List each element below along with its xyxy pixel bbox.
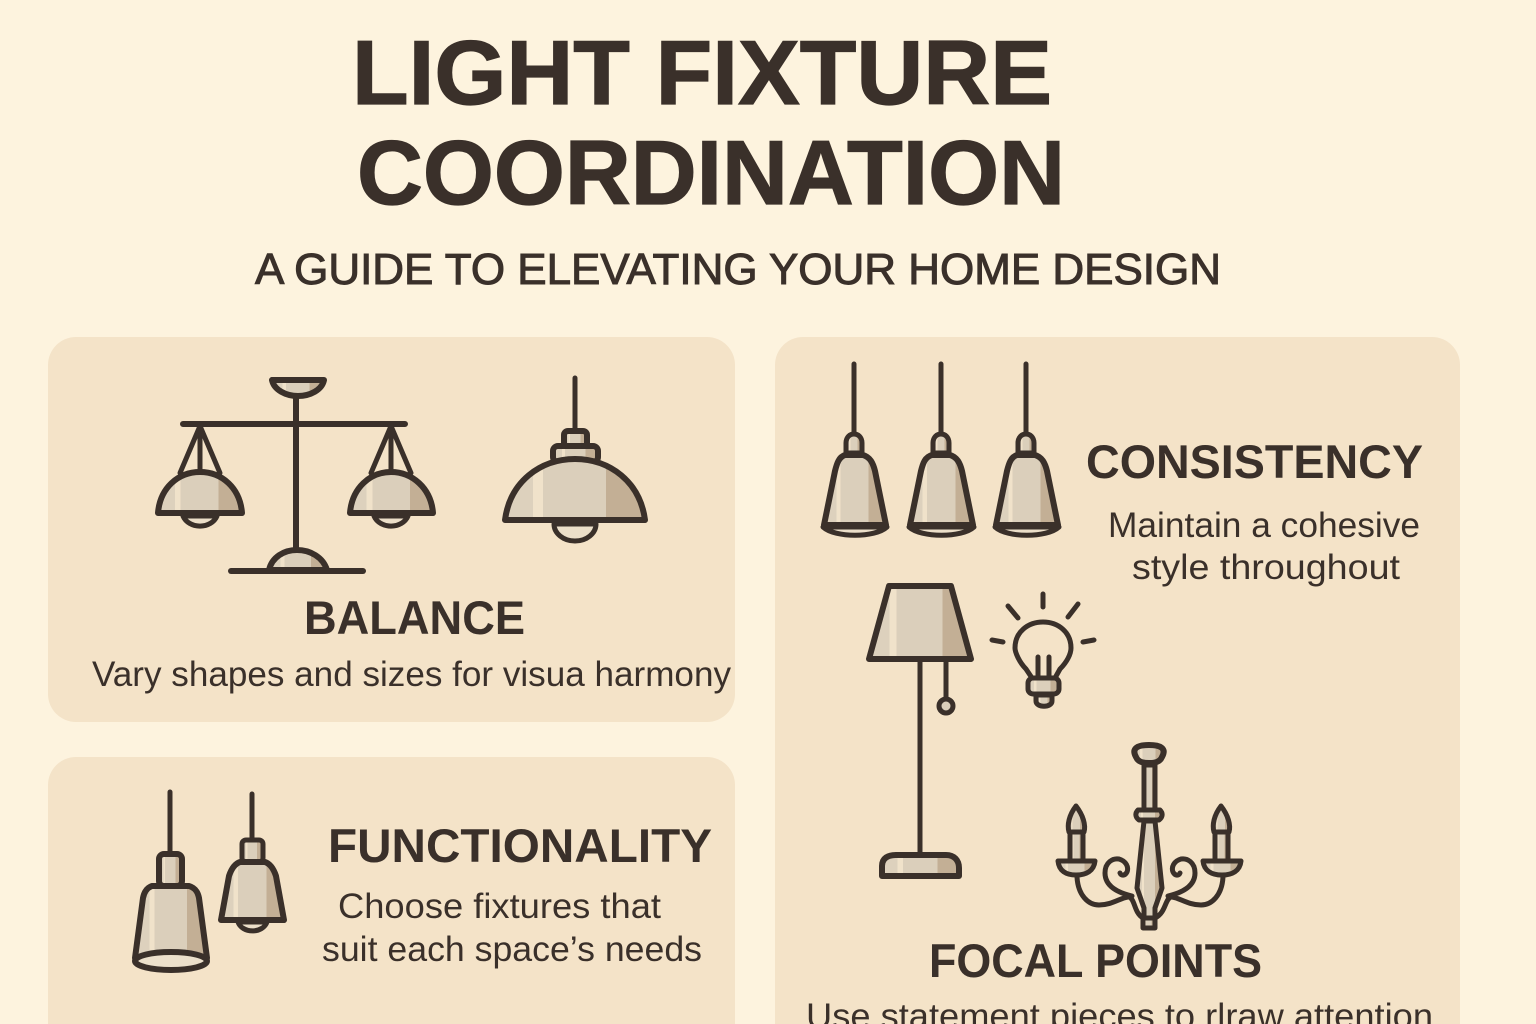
title: LIGHT FIXTURE <box>352 23 1052 124</box>
text: functionality description <box>322 887 702 969</box>
text: functionality description: suit each space’s needs <box>322 930 702 969</box>
panel: functionality <box>48 757 735 1024</box>
icon: two pendants <box>135 792 284 970</box>
title: COORDINATION <box>357 123 1065 224</box>
title <box>352 23 1065 224</box>
text: consistency description: style throughout <box>1132 548 1400 587</box>
heading: focal points: FOCAL POINTS <box>929 934 1262 987</box>
text: consistency description: Maintain a cohesive <box>1108 506 1420 545</box>
text: balance description: Vary shapes and sizes for visua harmony <box>92 655 731 694</box>
text: functionality description: Choose fixtures that <box>338 887 661 926</box>
icon: balance scale light fixture <box>158 380 433 571</box>
subtitle: A GUIDE TO ELEVATING YOUR HOME DESIGN <box>255 245 1221 294</box>
text: consistency description <box>1108 506 1420 587</box>
heading: functionality: FUNCTIONALITY <box>328 819 712 872</box>
icon: dome pendant <box>505 378 645 541</box>
heading: balance: BALANCE <box>304 591 525 644</box>
panel: balance <box>48 337 735 722</box>
icon: three bell pendants <box>823 364 1059 535</box>
icon: light bulb <box>992 594 1094 706</box>
icon: chandelier <box>1058 745 1241 928</box>
icon: floor lamp <box>869 586 971 876</box>
heading: consistency: CONSISTENCY <box>1086 435 1423 488</box>
panel: consistency and focal points <box>775 337 1460 1024</box>
